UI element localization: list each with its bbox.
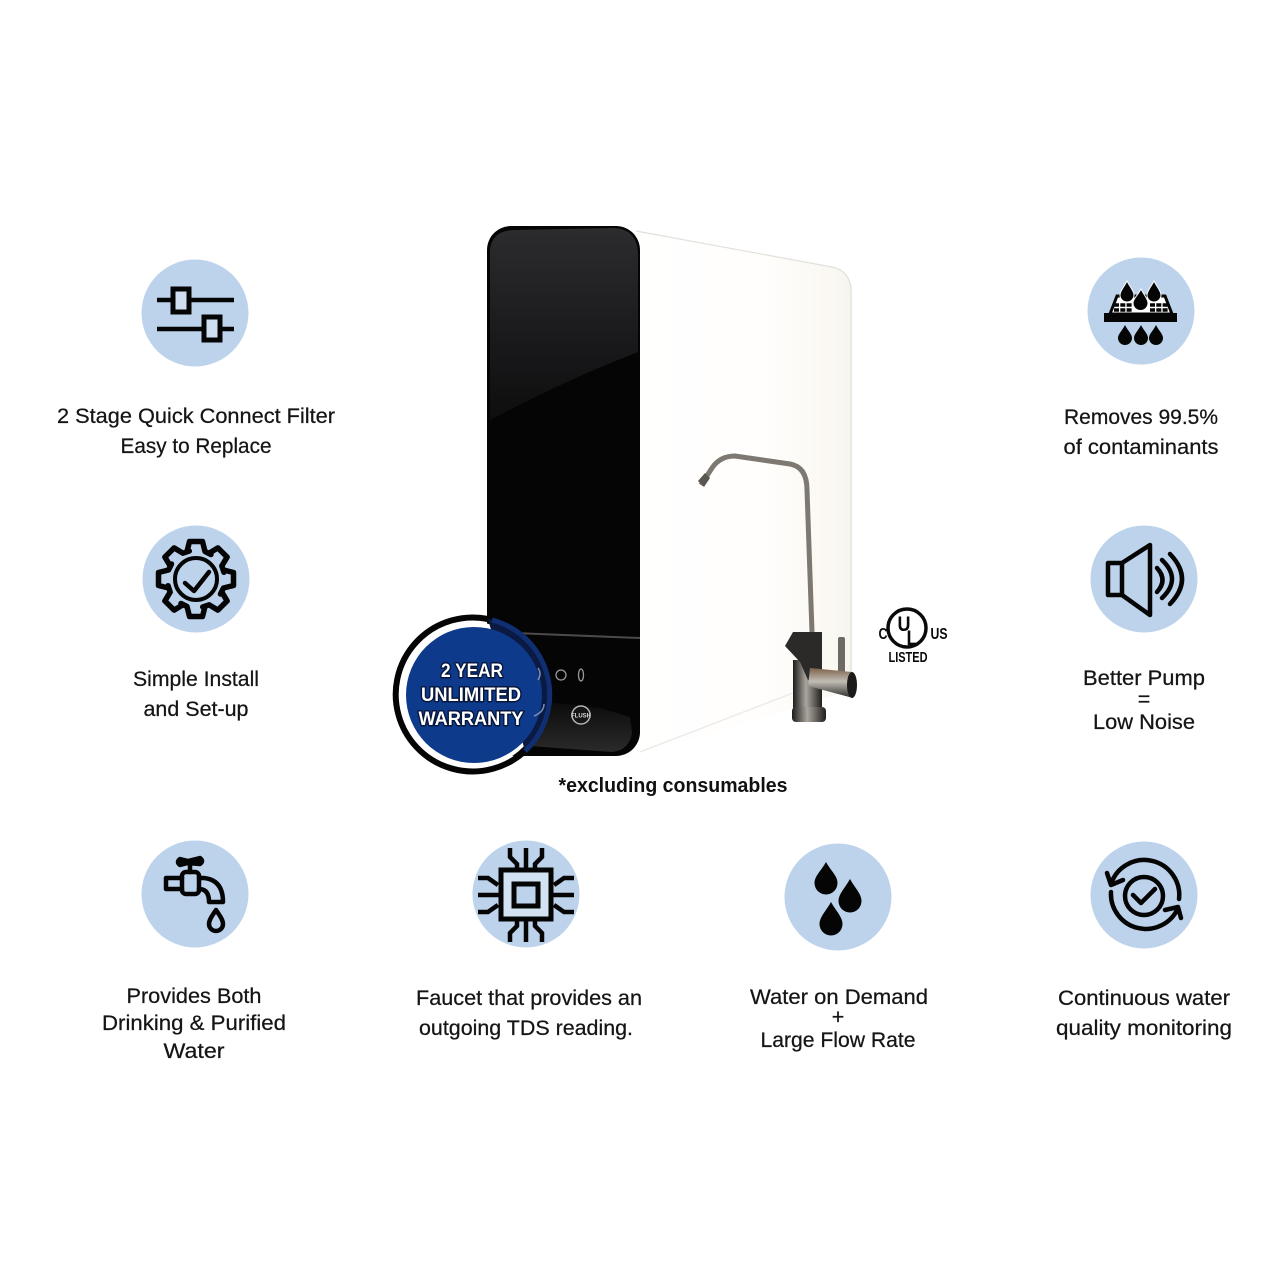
icon: cycle with check [1090,842,1198,948]
feature: quick connect filter [57,260,335,458]
UL listed certification mark: US [930,626,948,643]
unit side panel [620,228,852,756]
feature: drinking and purified water [102,840,286,1063]
label: quick connect filter: 2 Stage Quick Connect Filter [57,404,335,428]
UL listed certification mark: L [906,627,918,650]
label: removes contaminants: Removes 99.5% [1064,405,1218,429]
UL listed certification mark [878,609,948,666]
label: TDS faucet: outgoing TDS reading. [419,1016,633,1040]
warranty badge: WARRANTY [418,708,524,730]
feature: water on demand [750,844,928,1052]
unit black front panel: FLUSH [571,714,591,720]
feature: simple install [133,526,259,721]
icon: gear with check [142,526,250,632]
label: quick connect filter [57,404,335,458]
UL listed certification mark: U [898,613,910,636]
label: water quality monitoring: Continuous water [1058,986,1230,1010]
label: simple install: Simple Install [133,667,259,691]
warranty badge [396,617,550,771]
icon: tap with drop [142,840,248,948]
label: drinking and purified water: Provides Both [126,984,262,1008]
label: water on demand: Large Flow Rate [760,1028,916,1052]
feature: low noise pump [1083,526,1205,734]
label: removes contaminants [1064,405,1218,459]
label: removes contaminants: of contaminants [1064,435,1218,459]
label: simple install [133,667,259,721]
label: simple install: and Set-up [144,697,249,721]
feature: removes contaminants [1064,258,1218,459]
unit black front panel [487,226,640,756]
label: drinking and purified water: Drinking & Purified [102,1011,286,1035]
label: quick connect filter: Easy to Replace [120,434,272,458]
label: water on demand [750,985,928,1052]
icon: speaker [1090,526,1198,632]
product: water filter unit [487,226,857,756]
warranty footnote: *excluding consumables [558,775,788,797]
UL listed certification mark: LISTED [888,649,928,666]
warranty badge: UNLIMITED [421,684,521,706]
icon: sliders [142,260,248,366]
warranty badge: 2 YEAR [441,660,503,682]
label: water quality monitoring: quality monitoring [1056,1016,1232,1040]
label: low noise pump: Low Noise [1093,710,1195,734]
label: drinking and purified water: Water [164,1039,224,1063]
icon: chip [472,840,580,948]
icon: three water drops [784,844,892,950]
feature: water quality monitoring [1056,842,1232,1040]
label: TDS faucet [416,986,642,1040]
UL listed certification mark: C [878,626,888,643]
label: low noise pump: = [1138,687,1150,711]
label: water on demand: + [832,1005,844,1029]
label: drinking and purified water [102,984,286,1063]
feature: TDS faucet [416,840,642,1040]
label: water on demand: Water on Demand [750,985,928,1009]
label: low noise pump: Better Pump [1083,666,1205,690]
faucet [698,456,857,722]
icon: filter tray with drops [1088,258,1194,364]
label: low noise pump [1083,666,1205,734]
label: water quality monitoring [1056,986,1232,1040]
label: TDS faucet: Faucet that provides an [416,986,642,1010]
